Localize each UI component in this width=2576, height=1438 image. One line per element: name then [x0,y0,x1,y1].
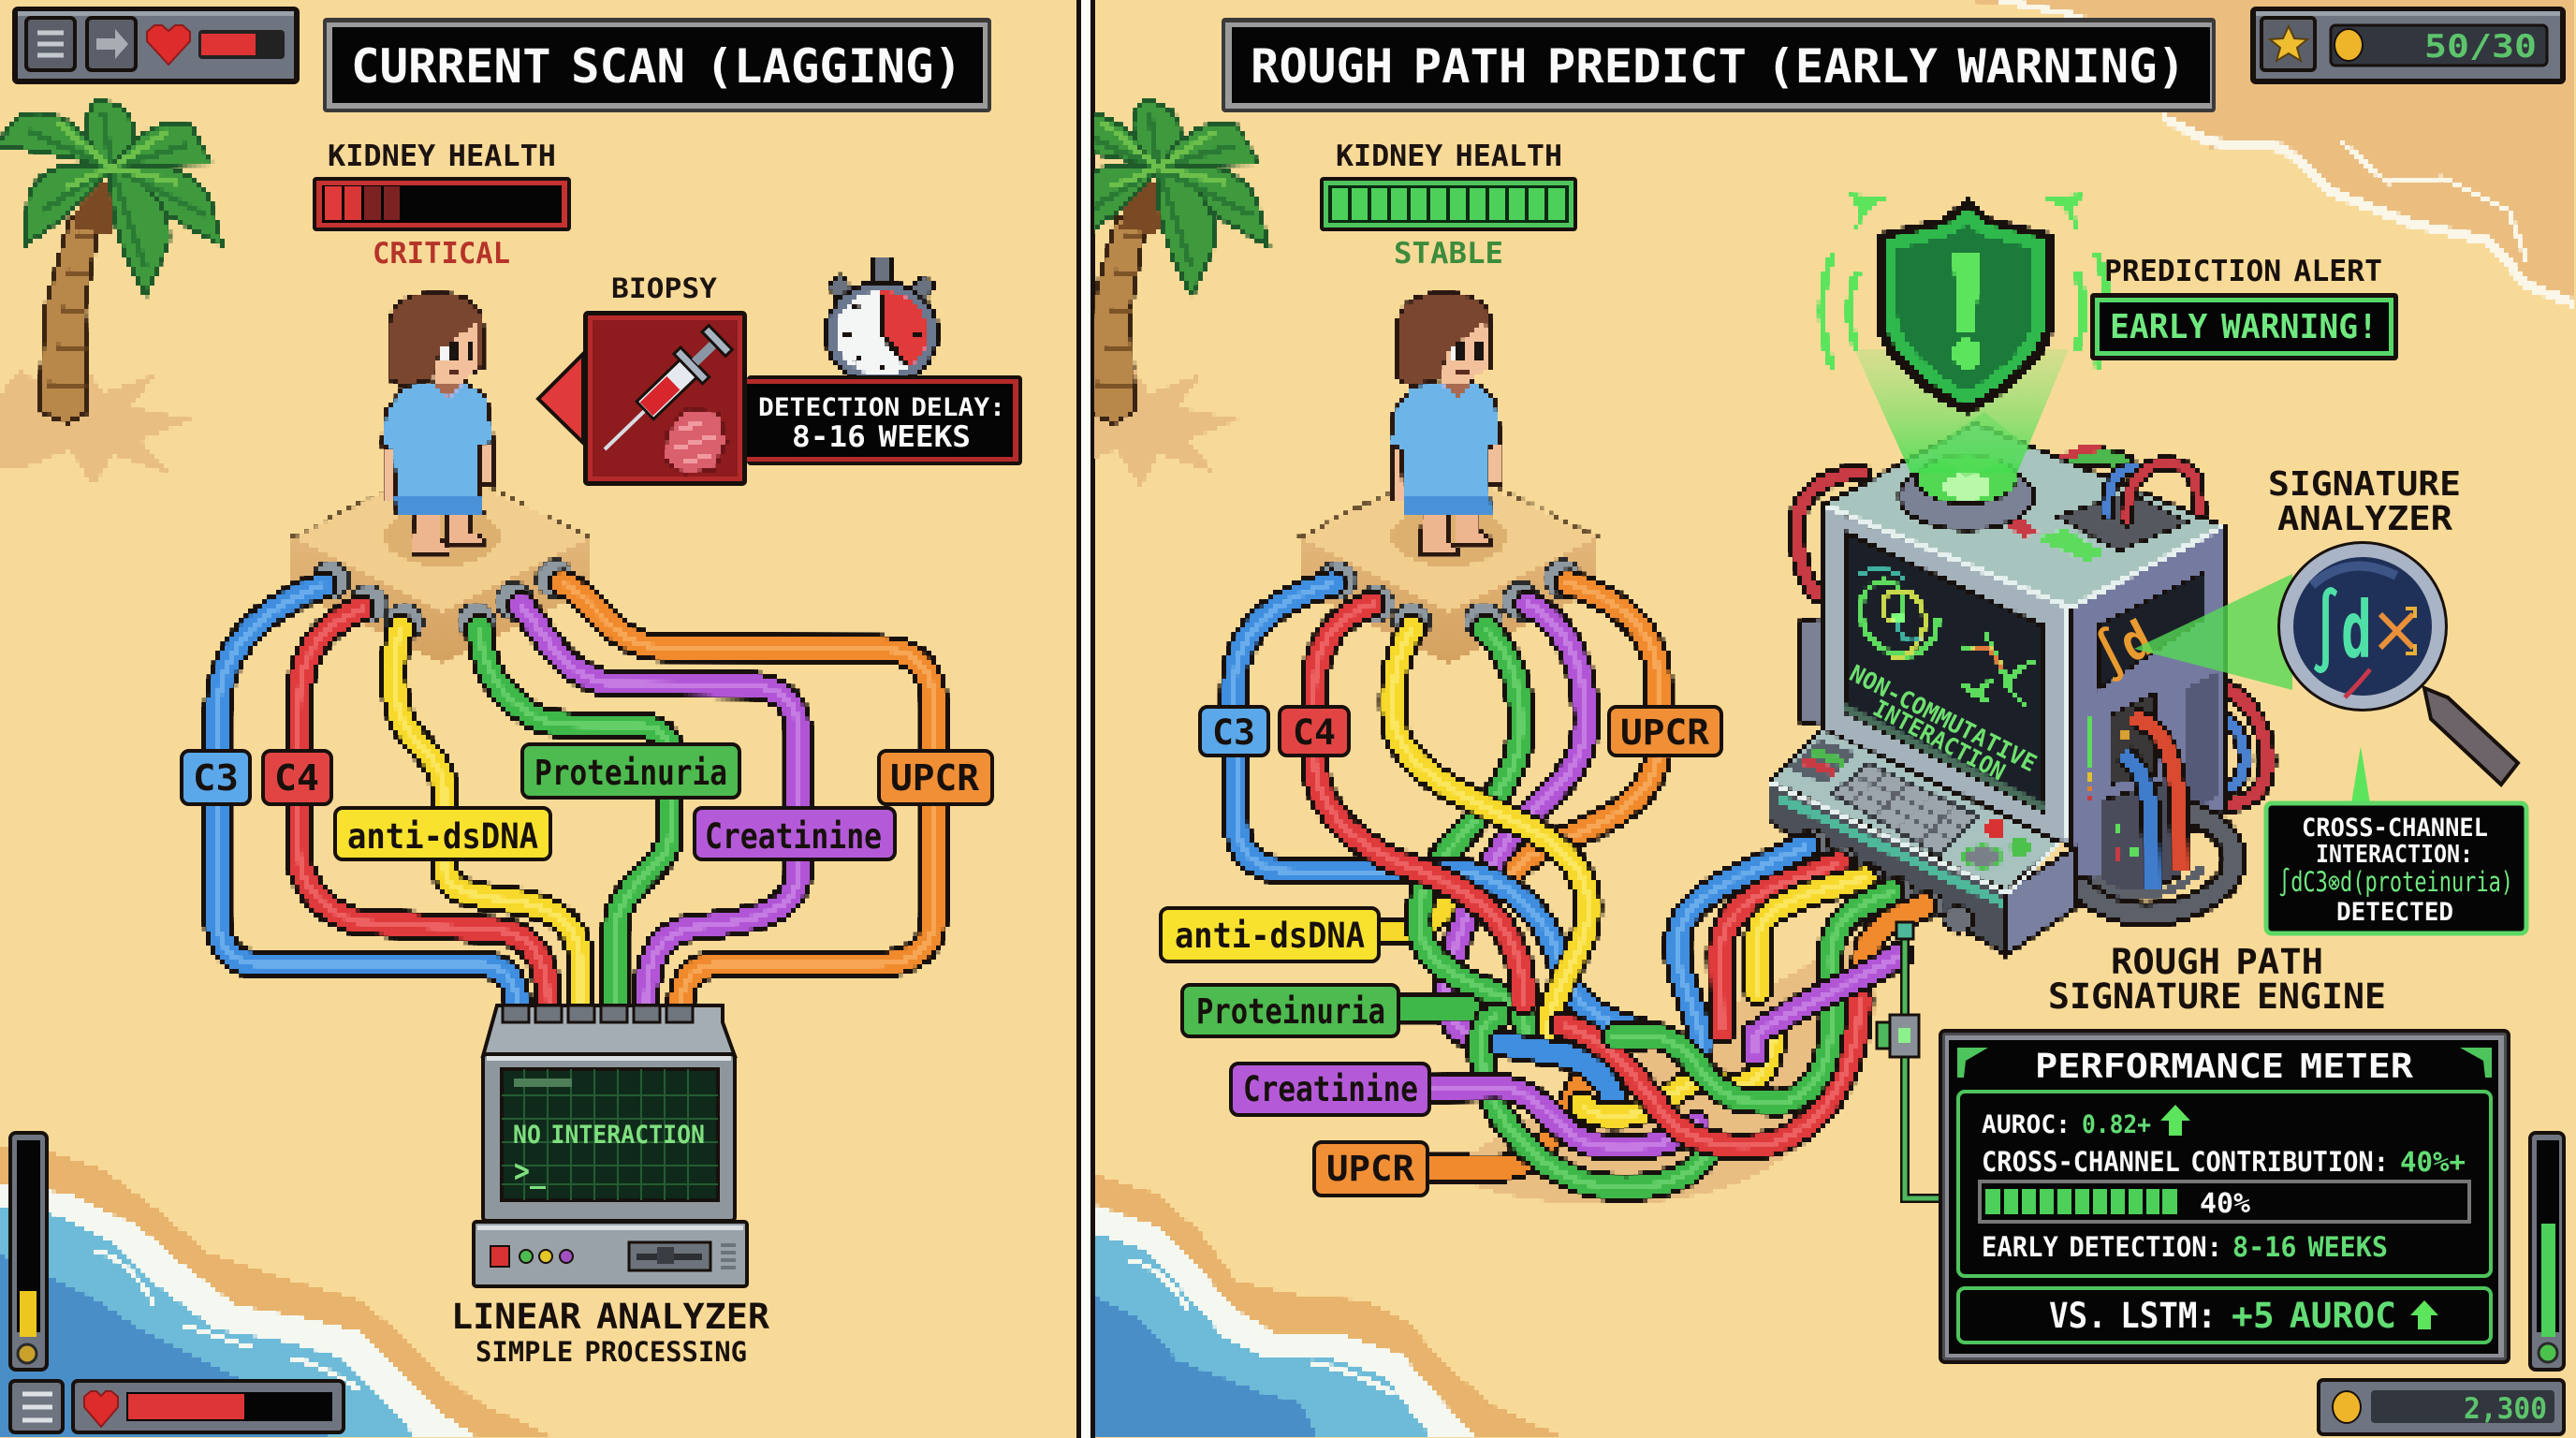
metrics box: 40%+ [2400,1146,2466,1178]
screen: NO INTERACTION [513,1121,705,1150]
HUD bottom right: 2,300 [2464,1392,2547,1426]
tube: red rising [1720,864,1838,1030]
signature analyzer heading [2268,465,2461,538]
label creatinine left [695,808,895,859]
label C4 right [1280,707,1349,756]
kidney health right: KIDNEY HEALTH [1336,139,1562,173]
tube: creatinine purple [521,606,798,1009]
cross-channel interaction callout [2266,803,2526,933]
label proteinuria left [522,744,739,798]
label C3 left [182,751,250,804]
tube: UPCR orange [563,583,934,1009]
side tubes in machine [2123,716,2181,889]
platform left [292,466,591,663]
port band [1798,829,1973,932]
progress bar [1980,1181,2469,1222]
machine text on screen: ∫d [2085,609,2161,687]
screen [502,1069,718,1200]
tube: green lower loop [1481,1016,1711,1188]
icon: menu button bottom [10,1381,63,1432]
tube: yellow knot [1582,1039,1774,1116]
icon: syringe [591,323,735,464]
scan beam from magnifier [2134,574,2292,690]
tube: blue knot piece [1502,1044,1615,1100]
stopwatch [826,257,938,385]
icon: menu button [26,18,75,70]
biopsy card: BIOPSY [611,272,718,304]
score readout [2331,25,2547,66]
tube: red knot [1563,999,1860,1146]
cables behind machine [1797,448,2267,805]
linear analyzer caption: LINEAR ANALYZER [451,1297,770,1337]
shield alert icon [1822,194,2108,415]
label C4 right: C4 [1293,712,1336,753]
dome emitter [1899,455,2034,530]
score readout: 50/30 [2424,28,2537,66]
connector wire to performance meter [1877,922,1940,1198]
label C3 left: C3 [193,757,239,799]
title left: CURRENT SCAN (LAGGING) [351,39,962,94]
beach right: ocean and shoreline [1095,1175,1564,1438]
patient right [1390,293,1501,553]
cable loop bottom of machine [2082,814,2234,915]
tube: anti-dsDNA yellow [394,628,580,1009]
rough path signature engine caption [2048,942,2386,1017]
kidney health right [1320,139,1577,271]
screen: >_ [514,1152,546,1190]
HUD top left [12,7,300,84]
tube: green rising [1615,892,1892,1103]
comparison box: +5 AUROC [2232,1296,2396,1336]
label C4 left [263,751,331,804]
linear analyzer machine [474,1005,747,1286]
cross-channel interaction callout: CROSS-CHANNEL [2302,814,2488,843]
icon: heart [147,25,190,65]
tube: yellow rising [1758,878,1865,992]
metrics box: 8-16 WEEKS [2232,1231,2388,1263]
tube: C3 blue [217,585,518,1009]
panel divider [1076,0,1095,1438]
tube: C4 red top [1314,604,1372,712]
tube: blue through knot [1237,754,1638,1030]
corner brackets [1957,1048,2492,1078]
label C3 right [1200,707,1268,756]
progress bar: 40% [2200,1187,2251,1219]
detection delay box: DETECTION DELAY: [758,393,1005,422]
health bar top left [198,30,285,59]
galaxy and chart on screen [1858,569,2036,707]
tubes right [1234,583,1924,1204]
tube: C3 blue top [1234,583,1332,712]
health bar bottom left [73,1381,344,1432]
performance meter panel [1940,1031,2509,1362]
callout pointer [2351,746,2370,803]
metrics box: EARLY DETECTION: [1982,1231,2222,1263]
patient left [382,293,493,553]
kidney health left [313,139,571,271]
magnifier signature analyzer [2277,541,2518,785]
palm tree right [1094,98,1273,487]
signature analyzer heading: ANALYZER [2277,500,2452,538]
rough path signature engine caption: ROUGH PATH [2111,942,2323,982]
linear analyzer caption [451,1297,770,1368]
tube: purple from port [1445,604,1586,1039]
metrics box: CROSS-CHANNEL CONTRIBUTION: [1982,1146,2389,1178]
icon: star button [2261,18,2315,70]
metrics box: AUROC: [1982,1110,2071,1139]
prediction alert: PREDICTION ALERT [2104,255,2382,288]
detection delay box [747,375,1022,465]
icon: tissue sample [665,408,726,474]
kidney health left: CRITICAL [373,237,510,271]
title right [1222,18,2216,112]
cross-channel interaction callout: DETECTED [2336,898,2453,927]
tubes left [217,583,934,1009]
screen [1845,533,2043,812]
label proteinuria left: Proteinuria [534,753,727,793]
rough path signature engine caption: SIGNATURE ENGINE [2048,976,2386,1017]
icon: arrow button [87,18,136,70]
vertical gauge left [10,1133,47,1370]
tube: proteinuria stub [1398,1007,1470,1009]
tube: UPCR orange top [1568,583,1659,712]
keyboard deck [1769,728,2058,891]
label anti-dsDNA left: anti-dsDNA [347,816,538,857]
kidney health left: KIDNEY HEALTH [328,139,556,173]
biopsy card [538,272,747,486]
prediction alert: EARLY WARNING! [2110,308,2378,346]
label C3 right: C3 [1212,712,1255,753]
label UPCR right [1609,707,1721,756]
tube: orange rising [1865,906,1924,974]
machine text on screen: NON-COMMUTATIVE [1845,660,2041,777]
beach top right: wet sand and foam [1956,0,2576,309]
tube: UPCR orange knot [1427,1067,1605,1168]
tube: UPCR orange lower [1507,749,1659,875]
label creatinine right: Creatinine [1243,1069,1418,1109]
performance meter panel: PERFORMANCE METER [2035,1048,2413,1086]
label UPCR left: UPCR [890,757,979,799]
platform right [1299,466,1598,663]
knot shadow [1442,936,1875,1204]
tube: yellow from port [1393,628,1588,1039]
magnifier signature analyzer: ∫d [2310,584,2372,676]
beach left: ocean and shoreline [0,1147,556,1438]
signature engine machine [1769,424,2267,954]
kidney health right: STABLE [1394,237,1503,271]
title right: ROUGH PATH PREDICT (EARLY WARNING) [1251,39,2186,94]
comparison box [1958,1288,2491,1343]
label UPCR lower right: UPCR [1326,1149,1415,1189]
label anti-dsDNA right [1161,908,1379,961]
cross-channel interaction callout: INTERACTION: [2316,841,2473,869]
detection delay box: 8-16 WEEKS [792,420,971,454]
metrics box: 0.82+ [2082,1110,2151,1139]
machine text on screen [1845,609,2161,785]
linear analyzer caption: SIMPLE PROCESSING [476,1336,747,1368]
palm tree left [0,100,222,487]
tube: creatinine purple knot [1429,1087,1696,1148]
tube: C4 red [299,609,549,1009]
front face [1822,506,2071,846]
icon: up arrow [2160,1105,2190,1136]
tube: blue rising [1677,846,1806,1056]
hologram beam [1854,349,2069,477]
label creatinine left: Creatinine [705,816,882,857]
tube: purple rising [1755,955,1900,1053]
signature analyzer heading: SIGNATURE [2268,465,2461,504]
label C4 left: C4 [274,757,319,799]
label UPCR lower right [1314,1142,1427,1196]
vertical gauge right [2530,1133,2564,1370]
tube: anti-dsDNA stub [1379,899,1456,932]
label proteinuria right: Proteinuria [1196,991,1385,1032]
HUD top right [2250,7,2566,84]
label UPCR left [879,751,992,804]
right face [2071,526,2224,908]
metrics box [1958,1092,2491,1276]
label anti-dsDNA right: anti-dsDNA [1175,916,1365,956]
tube: proteinuria green [479,628,670,1009]
icon: coin [2333,1391,2361,1423]
label proteinuria right [1182,985,1398,1036]
tube: green from port [1419,628,1527,1039]
prediction alert [2090,255,2398,360]
icon: up arrow large [2410,1300,2438,1329]
HUD bottom left [10,1381,344,1432]
tube: red through knot [1314,754,1524,1002]
machine text on screen: INTERACTION [1868,695,2010,785]
label creatinine right [1231,1064,1429,1115]
top face [1822,424,2224,608]
comparison box: VS. LSTM: [2049,1296,2217,1336]
title left [323,18,991,112]
HUD bottom right [2319,1380,2564,1434]
label UPCR right: UPCR [1620,712,1710,753]
